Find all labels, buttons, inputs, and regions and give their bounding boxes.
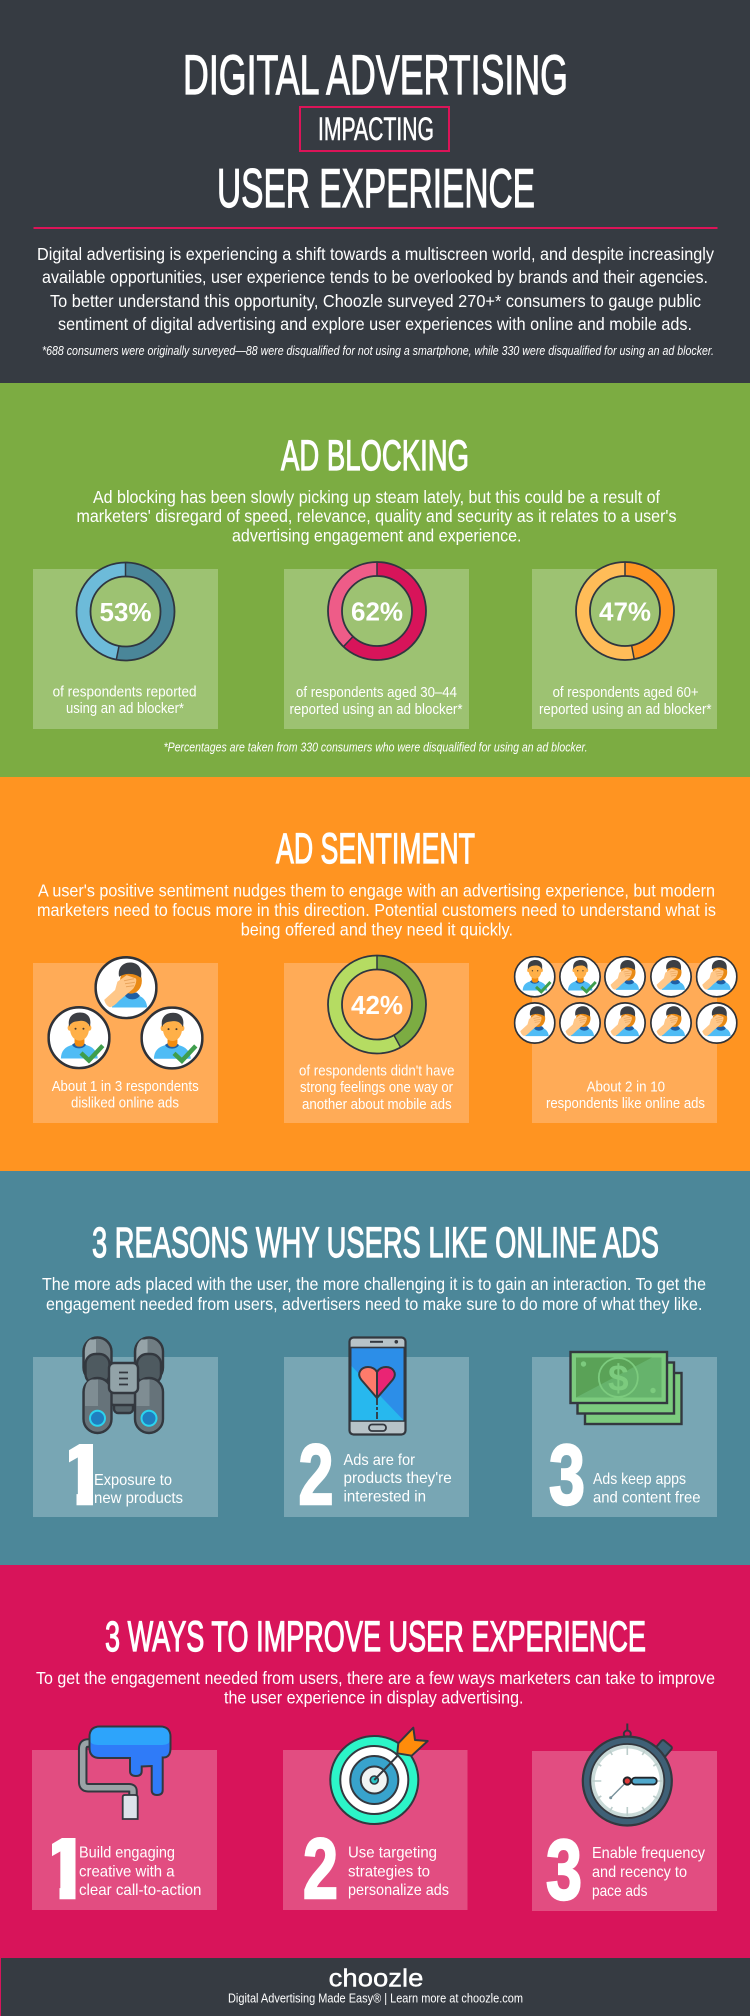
stat card: 62% <box>284 562 469 729</box>
panel: header <box>0 0 750 384</box>
number 2: 2 <box>303 1822 338 1917</box>
stat card: 53%: using an ad blocker* <box>66 701 184 717</box>
card text: Build engaging <box>79 1845 175 1862</box>
stat card: 1 in 3 disliked: disliked online ads <box>71 1096 179 1112</box>
icon: paint roller <box>83 1726 170 1819</box>
card text: Use targeting <box>348 1845 437 1862</box>
number 2: 2 <box>298 1428 334 1523</box>
panel: ad blocking <box>0 383 750 777</box>
stat card: 42%: of respondents didn't have <box>299 1064 454 1080</box>
panel: footer <box>0 1958 750 2016</box>
stat card: 1 in 3 disliked <box>33 957 218 1123</box>
card text: and content free <box>593 1490 701 1507</box>
card text: pace ads <box>592 1883 647 1900</box>
number 1: 1 <box>57 1428 109 1523</box>
intro paragraph: sentiment of digital advertising and explore user experiences with online and mobile ads. <box>58 314 692 334</box>
stat card: 47%: of respondents aged 60+ <box>553 685 699 701</box>
card text: interested in <box>344 1489 426 1506</box>
footer tagline: Digital Advertising Made Easy® | Learn more at choozle.com <box>228 1991 523 2006</box>
title box: impacting: IMPACTING <box>318 111 434 147</box>
stat card: 53%: 53% <box>100 597 152 627</box>
3 reasons paragraph <box>42 1274 706 1314</box>
icon: phone with heart <box>350 1338 406 1434</box>
stat card: 53% <box>33 562 218 729</box>
card text: new products <box>94 1490 183 1507</box>
card text <box>344 1452 452 1506</box>
card text: Ads keep apps <box>593 1471 686 1488</box>
card text: and recency to <box>592 1864 687 1881</box>
percentages footnote: *Percentages are taken from 330 consumers who were disqualified for using an ad blocker. <box>164 741 588 755</box>
3 reasons paragraph: The more ads placed with the user, the more challenging it is to gain an interaction. To get the <box>42 1274 706 1294</box>
card text <box>94 1472 183 1507</box>
intro paragraph <box>37 244 714 334</box>
stat card: 47%: reported using an ad blocker* <box>539 702 712 718</box>
ad sentiment paragraph <box>37 881 716 940</box>
card: build engaging creative <box>32 1726 217 1917</box>
ad blocking paragraph: advertising engagement and experience. <box>232 526 522 546</box>
card: ads for products <box>284 1338 469 1523</box>
icon: binoculars <box>84 1338 163 1433</box>
stat card: 42%: strong feelings one way or <box>300 1080 453 1096</box>
stat card: 62%: reported using an ad blocker* <box>290 702 463 718</box>
card: ads keep apps free <box>532 1352 717 1523</box>
panel: ad sentiment <box>0 777 750 1171</box>
intro paragraph: available opportunities, user experience tends to be overlooked by brands and their agencies. <box>42 267 708 287</box>
stat card: 53%: of respondents reported <box>53 685 197 701</box>
ad blocking paragraph: marketers' disregard of speed, relevance, quality and security as it relates to a user's <box>76 506 677 526</box>
ad sentiment paragraph: being offered and they need it quickly. <box>241 920 513 940</box>
card text: Ads are for <box>344 1452 416 1469</box>
icon: stack of dollar bills <box>570 1352 682 1424</box>
card text: Exposure to <box>94 1472 172 1489</box>
3 ways paragraph <box>36 1668 715 1708</box>
intro paragraph: Digital advertising is experiencing a shift towards a multiscreen world, and despite increasingly <box>37 244 714 264</box>
title: user experience: USER EXPERIENCE <box>217 157 535 219</box>
card: enable frequency <box>532 1724 717 1918</box>
card text <box>593 1471 701 1507</box>
card: use targeting <box>283 1728 468 1917</box>
card text: products they're <box>344 1470 452 1487</box>
card text: Enable frequency <box>592 1845 705 1862</box>
title box: impacting <box>300 107 449 151</box>
ad blocking paragraph <box>76 487 677 546</box>
ad sentiment paragraph: A user's positive sentiment nudges them to engage with an advertising experience, but modern <box>38 881 715 901</box>
icon: target with arrow <box>330 1728 428 1824</box>
stat card: 2 in 10 like: respondents like online ads <box>546 1096 705 1112</box>
stat card: 2 in 10 like: About 2 in 10 <box>587 1080 665 1096</box>
stat card: 42%: another about mobile ads <box>302 1097 452 1113</box>
heading: ad blocking: AD BLOCKING <box>281 432 469 480</box>
number 3: 3 <box>549 1428 585 1523</box>
stat card: 47% <box>532 562 717 729</box>
card text: creative with a <box>79 1864 175 1881</box>
icon: stack of dollar bills: $ <box>608 1358 629 1398</box>
card: exposure to new products <box>33 1338 218 1523</box>
stat card: 42% <box>284 956 469 1123</box>
ad sentiment paragraph: marketers need to focus more in this direction. Potential customers need to understand what is <box>37 900 716 920</box>
stat card: 62%: 62% <box>351 596 403 626</box>
intro paragraph: To better understand this opportunity, Choozle surveyed 270+* consumers to gauge public <box>50 291 701 311</box>
3 ways paragraph: the user experience in display advertising. <box>224 1688 524 1708</box>
stat card: 42%: 42% <box>351 990 403 1020</box>
card text <box>592 1845 705 1900</box>
card text <box>79 1845 201 1899</box>
panel: 3 reasons <box>0 1171 750 1565</box>
3 reasons paragraph: engagement needed from users, advertisers need to make sure to do more of what they like. <box>46 1294 702 1314</box>
number 1: 1 <box>40 1822 92 1917</box>
icon: stopwatch <box>583 1724 673 1826</box>
stat card: 47%: 47% <box>599 596 651 626</box>
ad blocking paragraph: Ad blocking has been slowly picking up steam lately, but this could be a result of <box>93 487 660 507</box>
stat card: 2 in 10 like <box>515 957 737 1123</box>
stat card: 62%: of respondents aged 30–44 <box>296 685 457 701</box>
card text: personalize ads <box>348 1882 449 1899</box>
stat card: 1 in 3 disliked: About 1 in 3 respondents <box>52 1079 199 1095</box>
card text: strategies to <box>348 1864 430 1881</box>
card text: clear call-to-action <box>79 1882 201 1899</box>
panel: 3 ways <box>0 1565 750 1958</box>
logo: choozle: choozle <box>329 1964 423 1992</box>
heading: ad sentiment: AD SENTIMENT <box>276 825 475 873</box>
card text <box>348 1845 449 1899</box>
number 3: 3 <box>546 1823 582 1918</box>
